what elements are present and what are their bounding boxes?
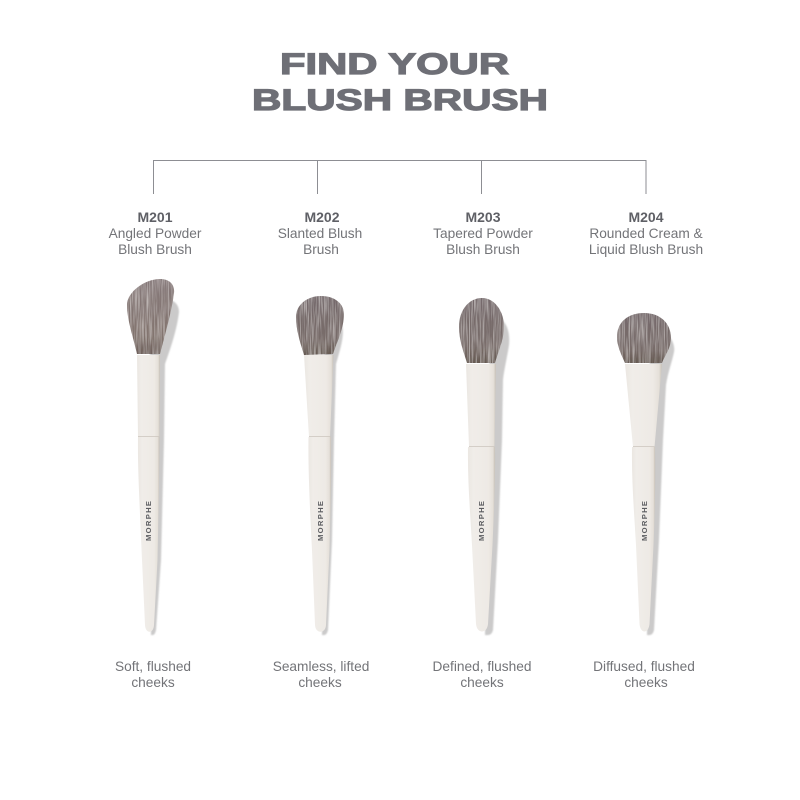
brush: M201: MORPHE [144, 501, 153, 541]
label: M203 Tapered Powder Blush Brush: Blush Brush [446, 242, 520, 257]
title: BLUSH BRUSH [252, 84, 548, 117]
caption: Diffused, flushed cheeks: Diffused, flushed [593, 659, 695, 674]
label: M203 Tapered Powder Blush Brush: Tapered Powder [433, 226, 533, 241]
label: M202 Slanted Blush Brush: M202 [304, 209, 340, 225]
label: M201 Angled Powder Blush Brush: Blush Brush [118, 242, 192, 257]
brush: M202: MORPHE [316, 501, 325, 541]
bracket connector lines [154, 160, 646, 194]
caption: Soft, flushed cheeks [115, 659, 191, 690]
title: FIND YOUR [280, 48, 509, 81]
label: M202 Slanted Blush Brush: Brush [303, 242, 339, 257]
caption: Seamless, lifted cheeks: Seamless, lifted [273, 659, 369, 674]
brush: M203: MORPHE [477, 501, 486, 541]
caption: Seamless, lifted cheeks [273, 659, 369, 690]
brush: M201 [127, 279, 179, 635]
caption: Soft, flushed cheeks: cheeks [131, 675, 175, 690]
brush: M203 [459, 298, 509, 635]
brush: M204 [617, 313, 674, 635]
caption: Diffused, flushed cheeks [593, 659, 695, 690]
panel: M202 [273, 209, 369, 690]
brush: M202 [296, 296, 344, 635]
brush: M204: MORPHE [640, 501, 649, 541]
panel: M204 [589, 209, 703, 690]
caption: Defined, flushed cheeks [433, 659, 531, 690]
label: M204 Rounded Cream & Liquid Blush Brush: Liquid Blush Brush [589, 242, 703, 257]
label: M204 Rounded Cream & Liquid Blush Brush [589, 209, 703, 257]
label: M202 Slanted Blush Brush: Slanted Blush [278, 226, 362, 241]
title [252, 48, 548, 117]
label: M201 Angled Powder Blush Brush: Angled Powder [109, 226, 202, 241]
panel: M203 [433, 209, 533, 690]
label: M204 Rounded Cream & Liquid Blush Brush: Rounded Cream & [589, 226, 703, 241]
label: M203 Tapered Powder Blush Brush: M203 [465, 209, 501, 225]
caption: Defined, flushed cheeks: cheeks [460, 675, 504, 690]
label: M202 Slanted Blush Brush [278, 209, 362, 257]
caption: Defined, flushed cheeks: Defined, flushed [433, 659, 531, 674]
label: M201 Angled Powder Blush Brush [109, 209, 202, 257]
label: M203 Tapered Powder Blush Brush [433, 209, 533, 257]
caption: Soft, flushed cheeks: Soft, flushed [115, 659, 191, 674]
panel: M201 [109, 209, 202, 690]
label: M204 Rounded Cream & Liquid Blush Brush: M204 [628, 209, 664, 225]
caption: Diffused, flushed cheeks: cheeks [624, 675, 668, 690]
caption: Seamless, lifted cheeks: cheeks [298, 675, 342, 690]
label: M201 Angled Powder Blush Brush: M201 [137, 209, 173, 225]
